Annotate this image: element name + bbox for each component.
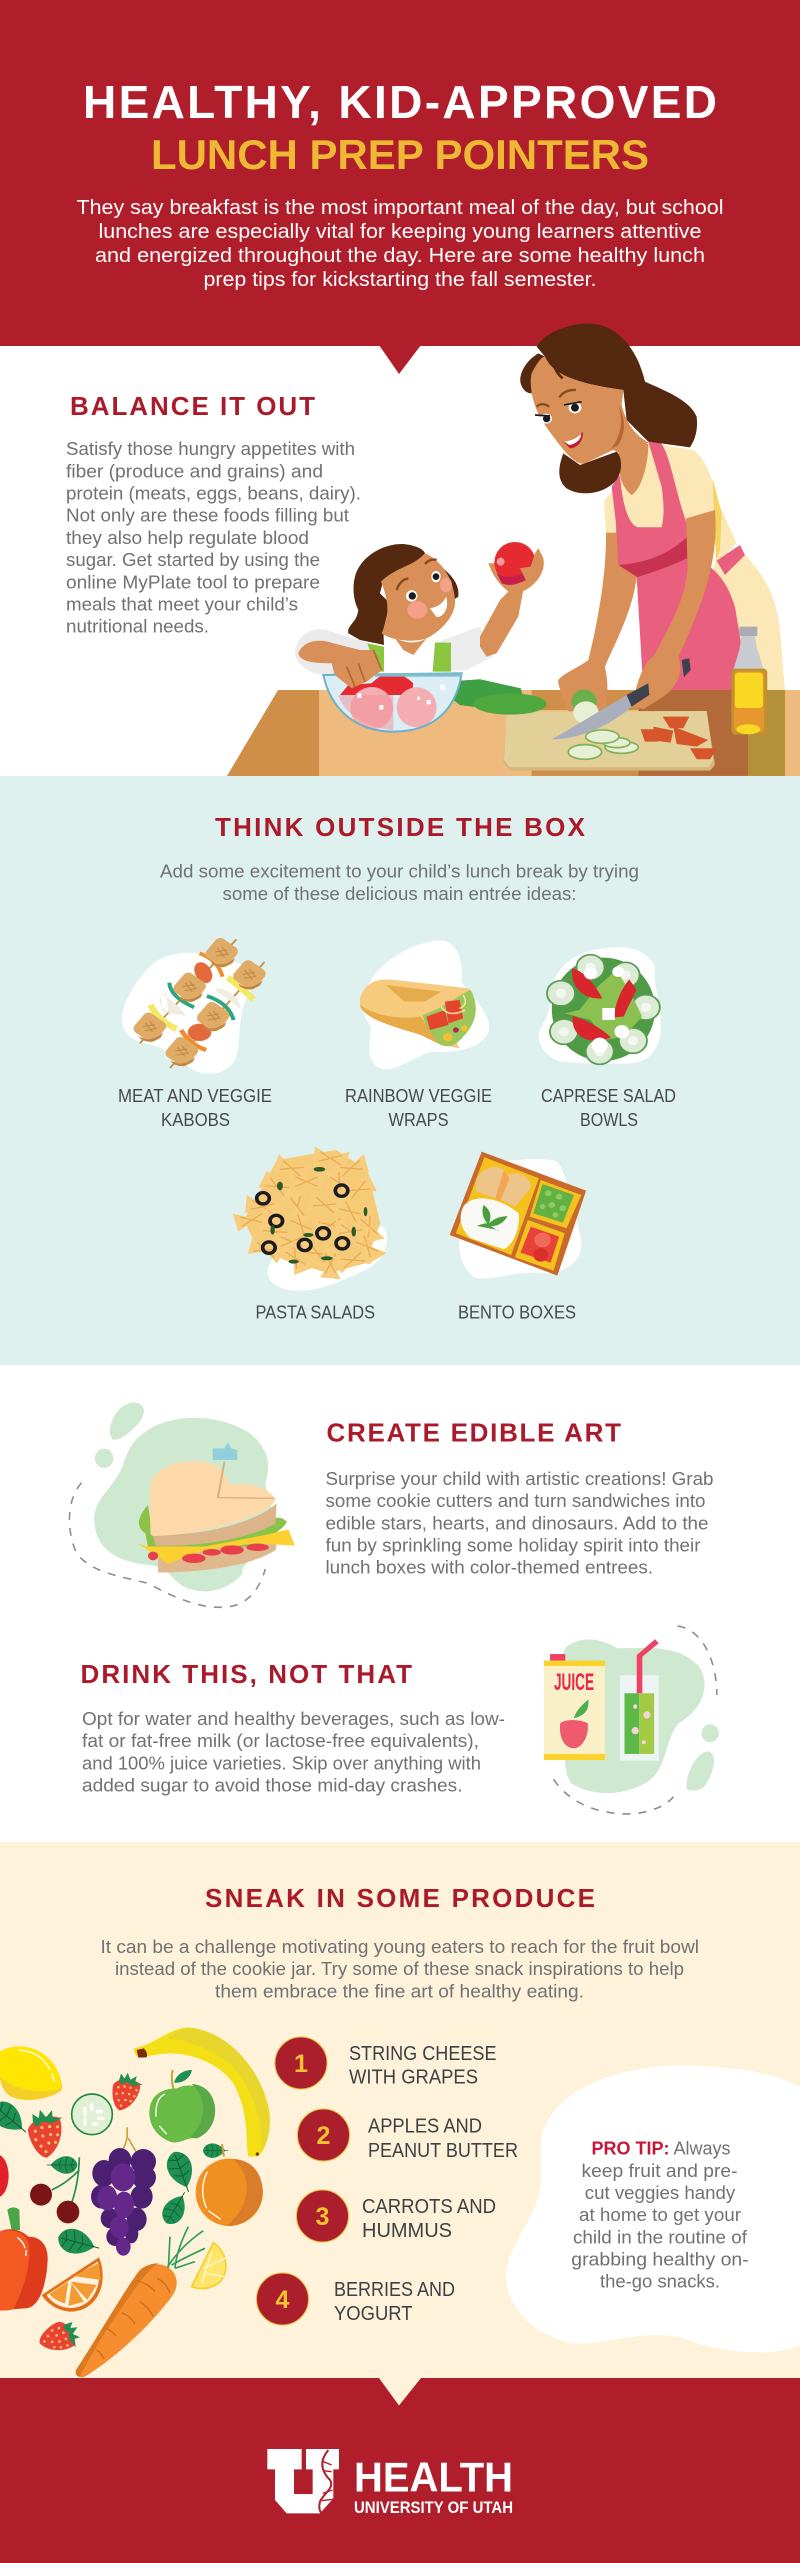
text: balance it out: sugar. Get started by using the [66, 550, 320, 570]
heading: create edible art: CREATE EDIBLE ART [326, 1418, 621, 1448]
text: create edible art: lunch boxes with color-themed entrees. [326, 1558, 653, 1578]
panel: balance it out [66, 323, 800, 776]
title [83, 76, 717, 178]
icon: bell pepper [0, 2207, 48, 2311]
callout: pro tip: PRO TIP: Always [592, 2138, 731, 2158]
text: sneak in some produce [100, 1937, 699, 2002]
text: drink this, not that: fat or fat-free milk (or lactose-free equivalents), [82, 1731, 479, 1751]
icon: grapes [91, 2127, 156, 2256]
icon: red pepper piece [0, 2154, 9, 2198]
illustration: juice box and glass [544, 1626, 719, 1814]
text: balance it out [66, 439, 361, 636]
text: sneak in some produce: them embrace the fine art of healthy eating. [215, 1982, 584, 2002]
title: HEALTHY, KID-APPROVED [83, 76, 717, 128]
item 4: BERRIES AND [334, 2279, 455, 2301]
callout: pro tip: cut veggies handy [585, 2183, 735, 2203]
text: think outside the box [160, 860, 639, 904]
item: caprese salad bowls [539, 947, 676, 1130]
illustration: fruits and vegetables [0, 2027, 270, 2377]
illustration: mother [520, 323, 785, 723]
intro text: prep tips for kickstarting the fall semester. [204, 269, 596, 291]
illustration: cutting board [503, 658, 717, 771]
text: think outside the box: some of these delicious main entrée ideas: [222, 883, 576, 904]
icon: pasta [233, 1146, 387, 1291]
icon: cucumber slice [72, 2094, 112, 2135]
logo: University of Utah Health: UNIVERSITY OF UTAH [354, 2499, 513, 2517]
icon: bento [450, 1152, 586, 1278]
logo: University of Utah Health [267, 2449, 513, 2517]
illustration: kitchen table [227, 690, 800, 776]
text: sneak in some produce: instead of the cookie jar. Try some of these snack inspirations to help [115, 1959, 684, 1979]
item 4 [256, 2273, 455, 2325]
intro text: lunches are especially vital for keeping young learners attentive [98, 221, 702, 243]
text: create edible art: fun by sprinkling some holiday spirit into their [326, 1536, 701, 1556]
text: drink this, not that: Opt for water and healthy beverages, such as low- [82, 1709, 505, 1729]
label: rainbow veggie wraps [345, 1086, 492, 1130]
text: balance it out: Satisfy those hungry appetites with [66, 439, 355, 459]
item: pasta salads [233, 1146, 387, 1322]
item 2: APPLES AND [368, 2116, 482, 2138]
item 1: 1 [294, 2050, 308, 2078]
intro text: They say breakfast is the most important meal of the day, but school [76, 197, 724, 219]
text: drink this, not that: added sugar to avoid those mid-day crashes. [82, 1776, 463, 1796]
panel: footer [0, 2378, 800, 2563]
icon: orange [196, 2144, 263, 2226]
text: sneak in some produce: It can be a challenge motivating young eaters to reach for the fruit bowl [100, 1937, 699, 1957]
item 4: 4 [276, 2286, 290, 2314]
item 2: 2 [317, 2122, 330, 2150]
callout: pro tip: keep fruit and pre- [582, 2161, 738, 2181]
text: balance it out: protein (meats, eggs, beans, dairy). [66, 484, 361, 504]
illustration: salad bowl [323, 650, 547, 732]
text: create edible art: edible stars, hearts, and dinosaurs. Add to the [326, 1514, 708, 1534]
item 1 [275, 2037, 496, 2089]
icon: banana [134, 2027, 270, 2157]
item: meat and veggie kabobs [118, 936, 272, 1130]
label: caprese salad bowls: BOWLS [580, 1110, 638, 1130]
callout: pro tip: grabbing healthy on- [571, 2250, 749, 2270]
title: LUNCH PREP POINTERS [151, 131, 649, 178]
illustration: oil bottle [731, 627, 767, 735]
label: rainbow veggie wraps: WRAPS [388, 1110, 448, 1130]
item 2 [298, 2109, 518, 2162]
callout: pro tip [506, 2066, 800, 2352]
text: create edible art: some cookie cutters and turn sandwiches into [326, 1491, 706, 1511]
item 3 [296, 2190, 496, 2242]
text: balance it out: nutritional needs. [66, 616, 209, 636]
icon: kabobs [122, 936, 268, 1074]
label: caprese salad bowls [541, 1086, 676, 1130]
logo: University of Utah Health: HEALTH [354, 2454, 513, 2500]
item: rainbow veggie wraps [345, 941, 492, 1130]
heading: sneak in some produce: SNEAK IN SOME PRODUCE [205, 1883, 595, 1913]
item 2: PEANUT BUTTER [368, 2140, 518, 2162]
pointer: footer [379, 2378, 421, 2406]
icon: cherries [30, 2157, 79, 2223]
illustration: heart sandwich [69, 1402, 295, 1607]
item 1: STRING CHEESE [349, 2043, 496, 2065]
panel: drink this, not that [80, 1626, 719, 1814]
icon: leaves [0, 2096, 228, 2260]
icon: apple [149, 2070, 215, 2142]
pointer: header [379, 345, 421, 374]
text: think outside the box: Add some excitement to your child’s lunch break by trying [160, 860, 639, 882]
list: snack ideas [256, 2037, 518, 2325]
item 3: CARROTS AND [362, 2196, 496, 2218]
heading: drink this, not that: DRINK THIS, NOT THAT [80, 1659, 412, 1689]
text: drink this, not that [82, 1709, 505, 1796]
icon: lemon slice [192, 2243, 226, 2289]
item 3: 3 [316, 2203, 329, 2231]
text: balance it out: online MyPlate tool to prepare [66, 572, 320, 592]
item 3: HUMMUS [362, 2220, 452, 2242]
callout: pro tip: at home to get your [579, 2205, 741, 2225]
label: bento boxes: BENTO BOXES [458, 1302, 576, 1322]
text: create edible art: Surprise your child with artistic creations! Grab [326, 1469, 714, 1489]
item 4: YOGURT [334, 2303, 412, 2325]
text: balance it out: fiber (produce and grains) and [66, 462, 323, 482]
text: drink this, not that: and 100% juice varieties. Skip over anything with [82, 1754, 481, 1774]
text: balance it out: Not only are these foods filling but [66, 506, 349, 526]
icon: salad [539, 947, 661, 1064]
label: rainbow veggie wraps: RAINBOW VEGGIE [345, 1086, 492, 1106]
heading: balance it out: BALANCE IT OUT [70, 391, 315, 421]
label: meat and veggie kabobs [118, 1086, 272, 1130]
text: balance it out: meals that meet your child’s [66, 594, 298, 614]
item: bento boxes [450, 1152, 586, 1322]
icon: wrap [360, 941, 489, 1069]
icon: strawberries [23, 2071, 144, 2362]
panel: sneak in some produce [0, 1842, 800, 2379]
illustration: juice box and glass: JUICE [554, 1669, 594, 1696]
intro text: and energized throughout the day. Here are some healthy lunch [95, 245, 705, 267]
intro text [76, 197, 724, 291]
heading: think outside the box: THINK OUTSIDE THE BOX [215, 812, 586, 842]
illustration: child [295, 542, 544, 688]
panel: create edible art [69, 1402, 713, 1607]
callout: pro tip: child in the routine of [573, 2228, 748, 2248]
icon: lemon [0, 2046, 62, 2100]
label: meat and veggie kabobs: MEAT AND VEGGIE [118, 1086, 272, 1106]
callout: pro tip: the-go snacks. [600, 2272, 720, 2292]
icon: orange slice [42, 2257, 103, 2312]
text: create edible art [326, 1469, 714, 1578]
panel: header [0, 0, 800, 374]
icon: carrot [76, 2227, 205, 2377]
item 1: WITH GRAPES [349, 2066, 478, 2088]
label: caprese salad bowls: CAPRESE SALAD [541, 1086, 676, 1106]
panel: think outside the box [0, 776, 800, 1365]
label: pasta salads: PASTA SALADS [256, 1302, 375, 1322]
label: meat and veggie kabobs: KABOBS [161, 1110, 230, 1130]
text: balance it out: they also help regulate blood [66, 528, 309, 548]
